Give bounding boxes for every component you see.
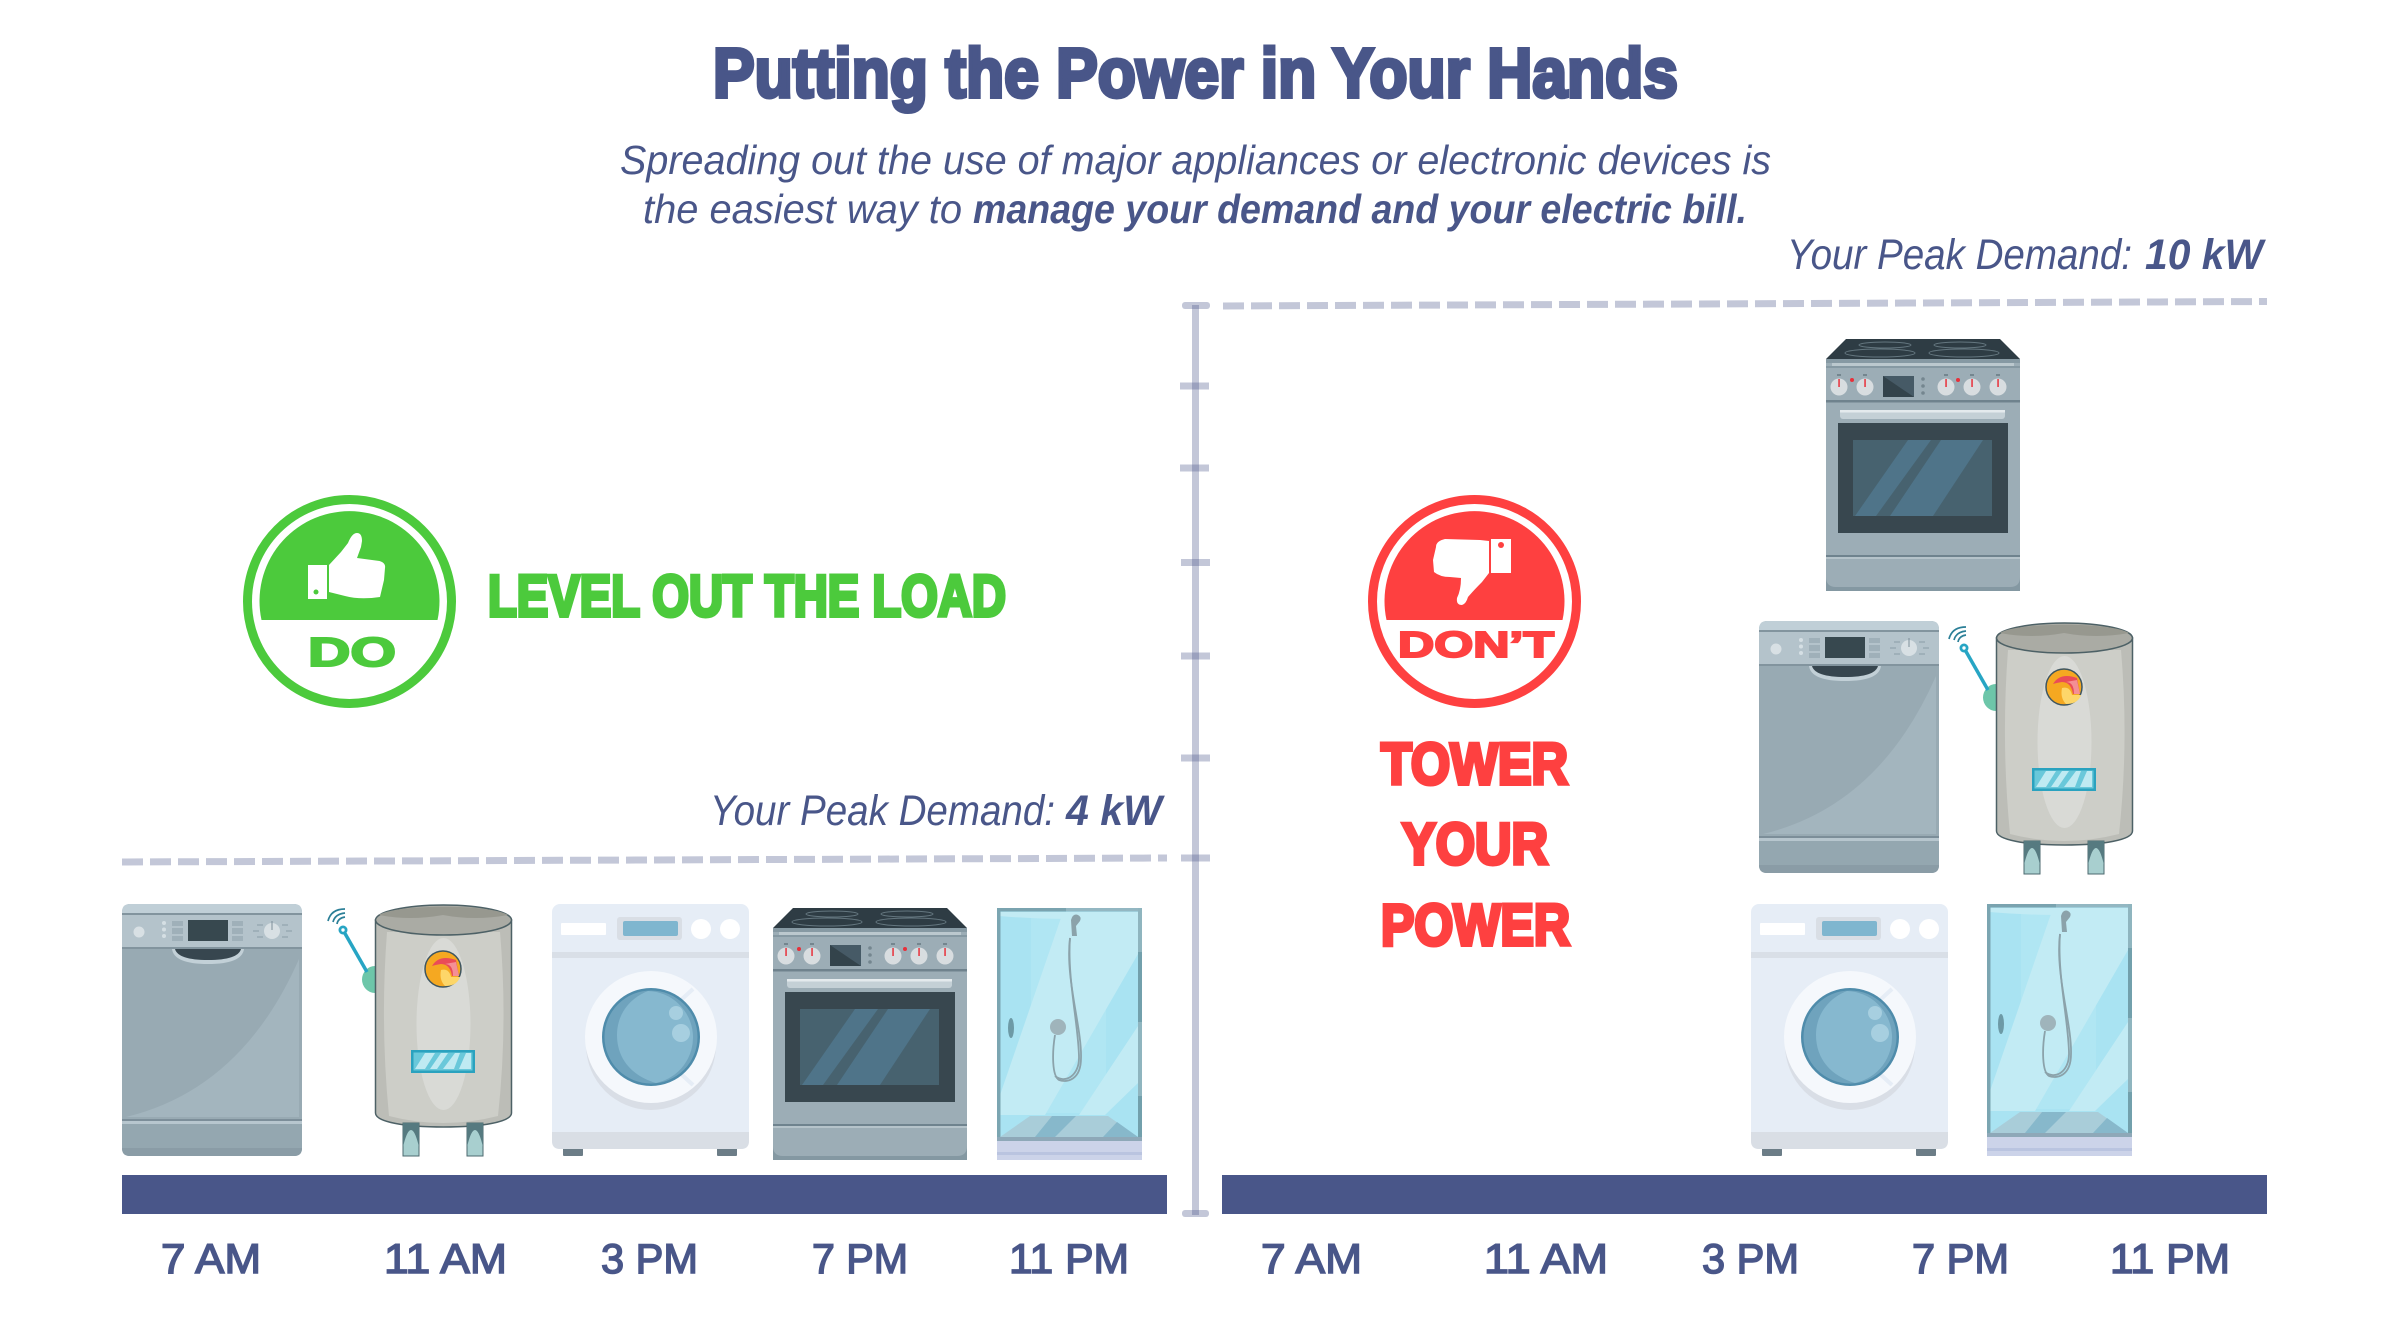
subtitle: manage your demand and your electric bill.: [973, 186, 1747, 232]
do badge: [248, 500, 452, 704]
heading: tower your power: TOWER: [1381, 732, 1568, 797]
time labels: [1261, 1235, 2230, 1282]
peak demand label: 10 kW: Your Peak Demand:: [1787, 231, 2132, 279]
appliance: dishwasher, stacked middle: [1759, 621, 1939, 873]
heading: tower your power: POWER: [1381, 893, 1570, 958]
appliance: washing machine: [552, 904, 749, 1156]
time labels: 7 PM: [1912, 1235, 2009, 1282]
time labels: 3 PM: [601, 1235, 698, 1282]
appliance: oven, stacked top: [1826, 339, 2020, 591]
time labels: 7 AM: [1261, 1235, 1362, 1282]
peak demand dashed line: 4 kW: [122, 858, 1167, 862]
appliance: washing machine, stacked bottom: [1751, 904, 1948, 1156]
panel: do, level out the load: [122, 500, 1167, 1282]
peak demand dashed line: 10 kW: [1223, 302, 2267, 306]
appliance: shower, stacked bottom: [1987, 904, 2132, 1156]
heading: tower your power: [1381, 732, 1570, 958]
appliance: shower: [997, 908, 1142, 1160]
subtitle: [620, 137, 1771, 232]
icon: thumbs down: [1433, 539, 1511, 605]
time labels: 11 PM: [2110, 1235, 2230, 1282]
heading: level out the load: LEVEL OUT THE LOAD: [488, 564, 1006, 629]
time labels: 3 PM: [1702, 1235, 1799, 1282]
vertical demand axis: [1180, 302, 1210, 1217]
peak demand label: 4 kW: 4 kW: [1065, 787, 1165, 835]
do label: DO: [308, 629, 396, 675]
time labels: 11 PM: [1009, 1235, 1129, 1282]
don't badge: [1372, 500, 1576, 704]
time labels: 11 AM: [384, 1235, 507, 1282]
icon: thumbs up: [308, 533, 385, 599]
time labels: 11 AM: [1484, 1235, 1608, 1282]
peak demand label: 4 kW: Your Peak Demand:: [710, 787, 1055, 835]
don't label: DON’T: [1398, 624, 1554, 665]
appliance: water heater, stacked middle: [1949, 623, 2132, 874]
appliance: water heater: [328, 905, 512, 1156]
appliance: dishwasher: [122, 904, 302, 1156]
timeline bar: [1222, 1175, 2267, 1214]
time labels: 7 AM: [161, 1235, 261, 1282]
subtitle: the easiest way to: [643, 186, 962, 232]
title: Putting the Power in Your Hands: [713, 34, 1678, 112]
subtitle: Spreading out the use of major appliances or electronic devices is: [620, 137, 1771, 183]
time labels: 7 PM: [812, 1235, 908, 1282]
panel: don't, tower your power: [1222, 231, 2267, 1282]
time labels: [161, 1235, 1129, 1282]
timeline bar: [122, 1175, 1167, 1214]
peak demand label: 10 kW: 10 kW: [2145, 231, 2266, 279]
heading: tower your power: YOUR: [1402, 812, 1548, 877]
appliance: oven: [773, 908, 967, 1160]
